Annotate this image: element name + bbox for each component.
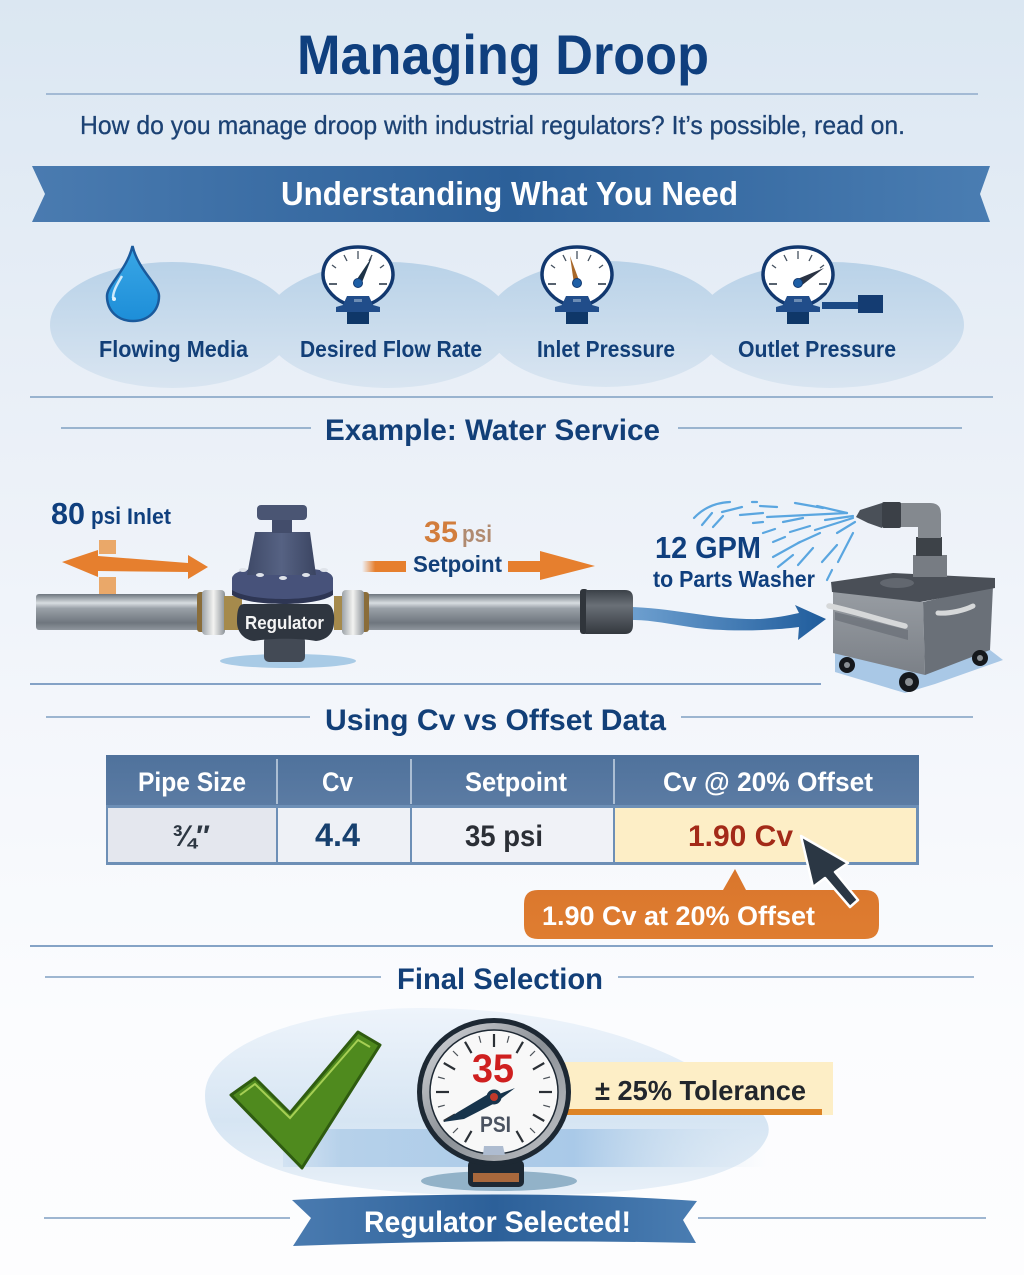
table row: 1.90 Cv: [688, 820, 793, 853]
icon: water drop: [107, 246, 159, 321]
table header: Pipe Size: [138, 767, 246, 797]
arrow: inlet double arrow: [62, 540, 208, 594]
table row: ¾″: [172, 820, 210, 853]
label: inlet pressure: Inlet Pressure: [537, 336, 675, 362]
heading: example: Example: Water Service: [325, 414, 660, 447]
heading: using cv: Using Cv vs Offset Data: [325, 704, 666, 737]
flow label: [653, 530, 815, 592]
icon: pressure gauge: 35: [472, 1047, 514, 1091]
table header: Setpoint: [465, 767, 567, 797]
tolerance label: ± 25% Tolerance: [595, 1075, 806, 1106]
table header: Cv @ 20% Offset: [663, 767, 873, 797]
inlet label: Inlet: [127, 504, 172, 529]
cloud background: [50, 261, 964, 388]
icon: pressure gauge: [417, 1018, 577, 1191]
outlet pipe cap: [580, 589, 633, 634]
inlet label: 80: [51, 496, 85, 531]
icon: flow rate gauge: [323, 247, 393, 324]
banner: understanding what you need: [32, 166, 990, 222]
setpoint label: Setpoint: [413, 551, 502, 577]
pipe: outlet: [366, 594, 584, 630]
background blob: [205, 1008, 769, 1196]
icon: check mark: [231, 1032, 380, 1168]
icon: inlet pressure gauge: [542, 247, 612, 324]
table row: 35 psi: [465, 820, 543, 853]
arrow: flow to parts washer: [633, 605, 826, 640]
setpoint label: [413, 516, 502, 577]
table row: [172, 817, 793, 853]
table header: [138, 767, 873, 797]
data table: [106, 755, 919, 865]
table row: 4.4: [315, 817, 360, 853]
panel: final selection: [205, 1008, 833, 1196]
title: Managing Droop: [297, 23, 709, 86]
arrow: setpoint: [362, 551, 595, 580]
panel: requirements: [50, 246, 964, 388]
setpoint label: 35: [424, 516, 458, 549]
label: outlet pressure: Outlet Pressure: [738, 336, 896, 362]
ribbon: regulator selected: [292, 1194, 697, 1246]
label: regulator: Regulator: [245, 613, 324, 633]
callout: [524, 869, 879, 939]
panel: water service diagram: [36, 496, 1003, 693]
icon: pressure gauge: PSI: [480, 1112, 511, 1137]
inlet label: [51, 496, 172, 531]
inlet label: psi: [91, 503, 121, 530]
table header: Cv: [322, 767, 353, 797]
subtitle: How do you manage droop with industrial regulators? It’s possible, read on.: [80, 110, 905, 140]
icon: cursor arrow: [801, 836, 858, 907]
pipe: inlet: [36, 594, 201, 630]
flow label: 12 GPM: [655, 530, 761, 565]
ribbon: regulator selected: Regulator Selected!: [364, 1206, 631, 1239]
regulator valve: [197, 505, 369, 668]
nozzle assembly: [913, 555, 947, 577]
callout: 1.90 Cv at 20% Offset: [542, 901, 815, 931]
banner: understanding what you need: Understanding What You Need: [281, 175, 738, 212]
icon: outlet pressure gauge: [763, 247, 883, 324]
label: desired flow rate: Desired Flow Rate: [300, 336, 482, 362]
heading: final selection: Final Selection: [397, 963, 603, 996]
water spray: [694, 502, 855, 580]
setpoint label: psi: [462, 521, 492, 548]
flow label: to Parts Washer: [653, 566, 815, 592]
label: flowing media: Flowing Media: [99, 336, 248, 362]
tolerance label: [560, 1062, 833, 1115]
parts washer: [829, 502, 1003, 693]
